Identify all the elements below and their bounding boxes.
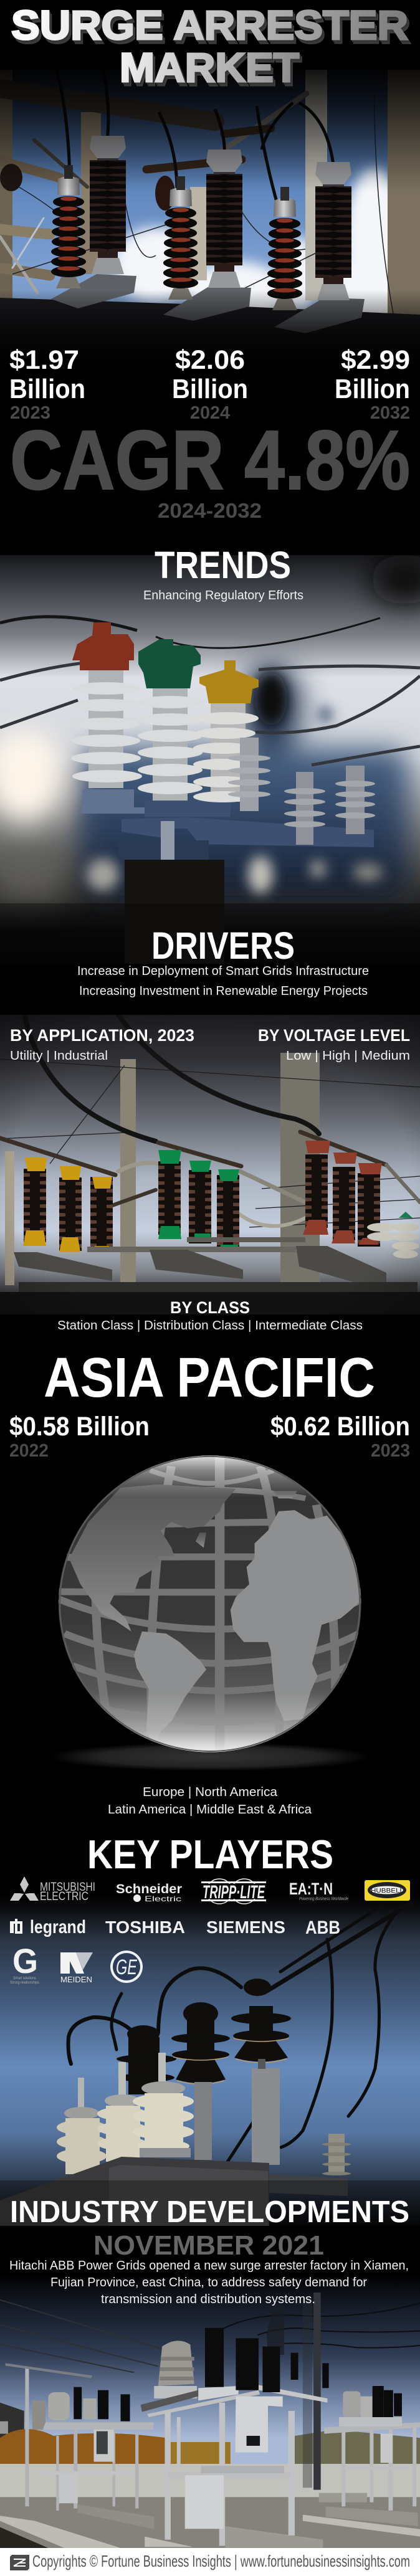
photo: arrester unit against blue sky: [0, 1894, 420, 2230]
stat 2032: [335, 345, 410, 423]
region heading: ASIA PACIFIC: [44, 1347, 375, 1409]
logo: Meiden: MEIDEN: [60, 1975, 92, 1984]
by class block: [57, 1298, 363, 1333]
logo: Meiden: [60, 1952, 93, 1984]
region value 2022: 2022: [9, 1441, 49, 1461]
title: MARKET: [121, 46, 300, 92]
logo: Mitsubishi Electric: [10, 1876, 95, 1903]
white insulator stack, red cap: [71, 622, 142, 788]
yellow arresters: [23, 1157, 113, 1252]
left gantry: [0, 2363, 154, 2511]
continents: [69, 1485, 297, 1632]
photo: coloured arresters on gantry: [0, 1014, 420, 1314]
development text: Hitachi ABB Power Grids opened a new surge arrester factory in Xiamen,: [9, 2259, 409, 2273]
cream insulator stack 2: [97, 2062, 147, 2162]
globe grid: [59, 1455, 361, 1752]
title: SURGE ARRESTER: [12, 4, 409, 50]
photo: porcelain insulators with coloured caps: [0, 554, 420, 964]
wall: [0, 2464, 420, 2498]
logo: Eaton: EA:T·N: [289, 1880, 333, 1898]
photo: surge arresters under blue sky: [0, 70, 420, 359]
footer band: [0, 2548, 420, 2576]
development text: [9, 2259, 409, 2306]
white insulator stack, yellow cap: [193, 660, 259, 802]
title: SURGE ARRESTER: [14, 6, 411, 52]
housing box: [0, 2157, 348, 2230]
logo: Legrand: legrand: [30, 1917, 86, 1937]
lattice tower and pole: [267, 2293, 321, 2490]
logo: Schneider Electric: Schneider: [116, 1882, 182, 1896]
title: [11, 2, 411, 94]
dark base beam: [0, 298, 420, 359]
other regions: [108, 1785, 312, 1817]
logo: Siemens: SIEMENS: [206, 1918, 285, 1937]
region value 2023: [270, 1412, 410, 1461]
red arrester D: [51, 165, 86, 288]
green arresters: [158, 1150, 239, 1248]
globe shadow: [50, 1742, 370, 1771]
globe: [59, 1455, 361, 1752]
title: MARKET: [122, 48, 302, 94]
treeline: [0, 2403, 420, 2465]
logo: Schneider Electric: [116, 1882, 182, 1903]
drivers heading: DRIVERS: [151, 924, 295, 967]
stat 2023: $1.97: [9, 345, 79, 375]
by voltage level block: Low | High | Medium: [286, 1049, 410, 1063]
black stats band: [0, 359, 420, 555]
region value 2023: 2023: [371, 1441, 410, 1461]
by voltage level block: [258, 1026, 410, 1063]
CAGR period: 2024-2032: [158, 499, 262, 522]
footer logo: [10, 2555, 29, 2570]
gravel ground: [0, 2497, 420, 2548]
region value 2022: $0.58 Billion: [9, 1412, 150, 1442]
logo: CG Power: Smart solutions.: [13, 1977, 37, 1980]
steel arrester mounts: [51, 274, 365, 333]
logo: Hubbell: HUBBELL: [371, 1888, 404, 1894]
logo: Toshiba: TOSHIBA: [105, 1918, 185, 1937]
region value 2022: [9, 1412, 150, 1461]
drivers text: Increasing Investment in Renewable Energy Projects: [79, 984, 368, 998]
logos: [10, 1876, 410, 1985]
by application block: Utility | Industrial: [10, 1049, 108, 1063]
small arrester 1: [228, 738, 270, 811]
stat 2023: [9, 345, 85, 423]
logo: GE: GE: [116, 1956, 137, 1979]
by voltage level block: BY VOLTAGE LEVEL: [258, 1026, 410, 1045]
stat 2023: 2023: [10, 403, 50, 423]
stat 2024: [172, 345, 248, 423]
logo: Eaton: Powering Business Worldwide: [299, 1897, 348, 1901]
red arrester F: [267, 187, 302, 310]
date: NOVEMBER 2021: [93, 2230, 324, 2261]
small arrester 2: [284, 772, 325, 845]
concrete footings: [0, 2493, 420, 2548]
drivers text: Increase in Deployment of Smart Grids Infrastructure: [77, 964, 369, 978]
by class block: BY CLASS: [170, 1298, 250, 1317]
overhead conductors: [0, 2300, 420, 2372]
logo: CG Power: G: [12, 1941, 38, 1980]
logo: Hubbell: [365, 1880, 410, 1901]
stat 2032: $2.99: [341, 345, 410, 375]
black bell insulators: [117, 1979, 291, 2094]
development text: transmission and distribution systems.: [101, 2293, 315, 2306]
black arrester B: [206, 150, 242, 288]
drivers text: [77, 964, 369, 998]
cream insulator stack 3: [133, 2053, 194, 2157]
white insulators far right: [367, 1212, 419, 1258]
photo: substation: [0, 2274, 420, 2548]
title: MARKET: [120, 44, 299, 90]
small grey arrester: [322, 2134, 351, 2175]
trends heading: TRENDS: [155, 544, 291, 586]
title: SURGE ARRESTER: [11, 2, 408, 48]
steel posts: [194, 2059, 280, 2165]
logo: Schneider Electric: Electric: [145, 1894, 181, 1903]
other regions: Europe | North America: [143, 1785, 278, 1799]
stat 2032: 2032: [370, 403, 410, 423]
logo: Tripp Lite: [201, 1879, 266, 1904]
logo: GE: [110, 1951, 143, 1983]
logo: ABB: ABB: [305, 1918, 340, 1938]
red arrester E: [163, 176, 198, 300]
steel cross-arm: [81, 789, 374, 860]
cream insulator stack 1: [57, 2078, 107, 2174]
by class block: Station Class | Distribution Class | Intermediate Class: [57, 1319, 363, 1333]
black text band: [0, 2226, 420, 2274]
post: [125, 860, 224, 964]
small arrester 3: [335, 766, 375, 834]
red arresters: [303, 1141, 382, 1247]
logo: Mitsubishi Electric: ELECTRIC: [40, 1890, 88, 1903]
stat 2024: $2.06: [175, 345, 245, 375]
centre gantry: [141, 2328, 329, 2546]
industry developments heading: INDUSTRY DEVELOPMENTS: [10, 2195, 409, 2229]
stat 2024: Billion: [172, 374, 248, 404]
logo: CG Power: Strong relationships.: [10, 1981, 40, 1985]
black arrester A: [90, 136, 126, 274]
by application block: BY APPLICATION, 2023: [10, 1026, 194, 1045]
right gantry: [324, 2386, 420, 2511]
stat 2032: Billion: [335, 374, 410, 404]
steel gantry: [14, 1237, 418, 1292]
other regions: Latin America | Middle East & Africa: [108, 1803, 312, 1817]
trends text: Enhancing Regulatory Efforts: [143, 589, 303, 602]
key players heading: KEY PLAYERS: [87, 1832, 333, 1877]
logo: Legrand: [10, 1917, 86, 1937]
logo: Mitsubishi Electric: MITSUBISHI: [40, 1881, 95, 1894]
by application block: [10, 1026, 194, 1063]
logo: Tripp Lite: TRIPP·LITE: [203, 1882, 265, 1903]
white insulator stack, green cap: [138, 639, 203, 801]
stat 2024: 2024: [190, 403, 230, 423]
black arrester C: [315, 162, 351, 300]
development text: Fujian Province, east China, to address safety demand for: [50, 2276, 367, 2289]
stat 2023: Billion: [9, 374, 85, 404]
